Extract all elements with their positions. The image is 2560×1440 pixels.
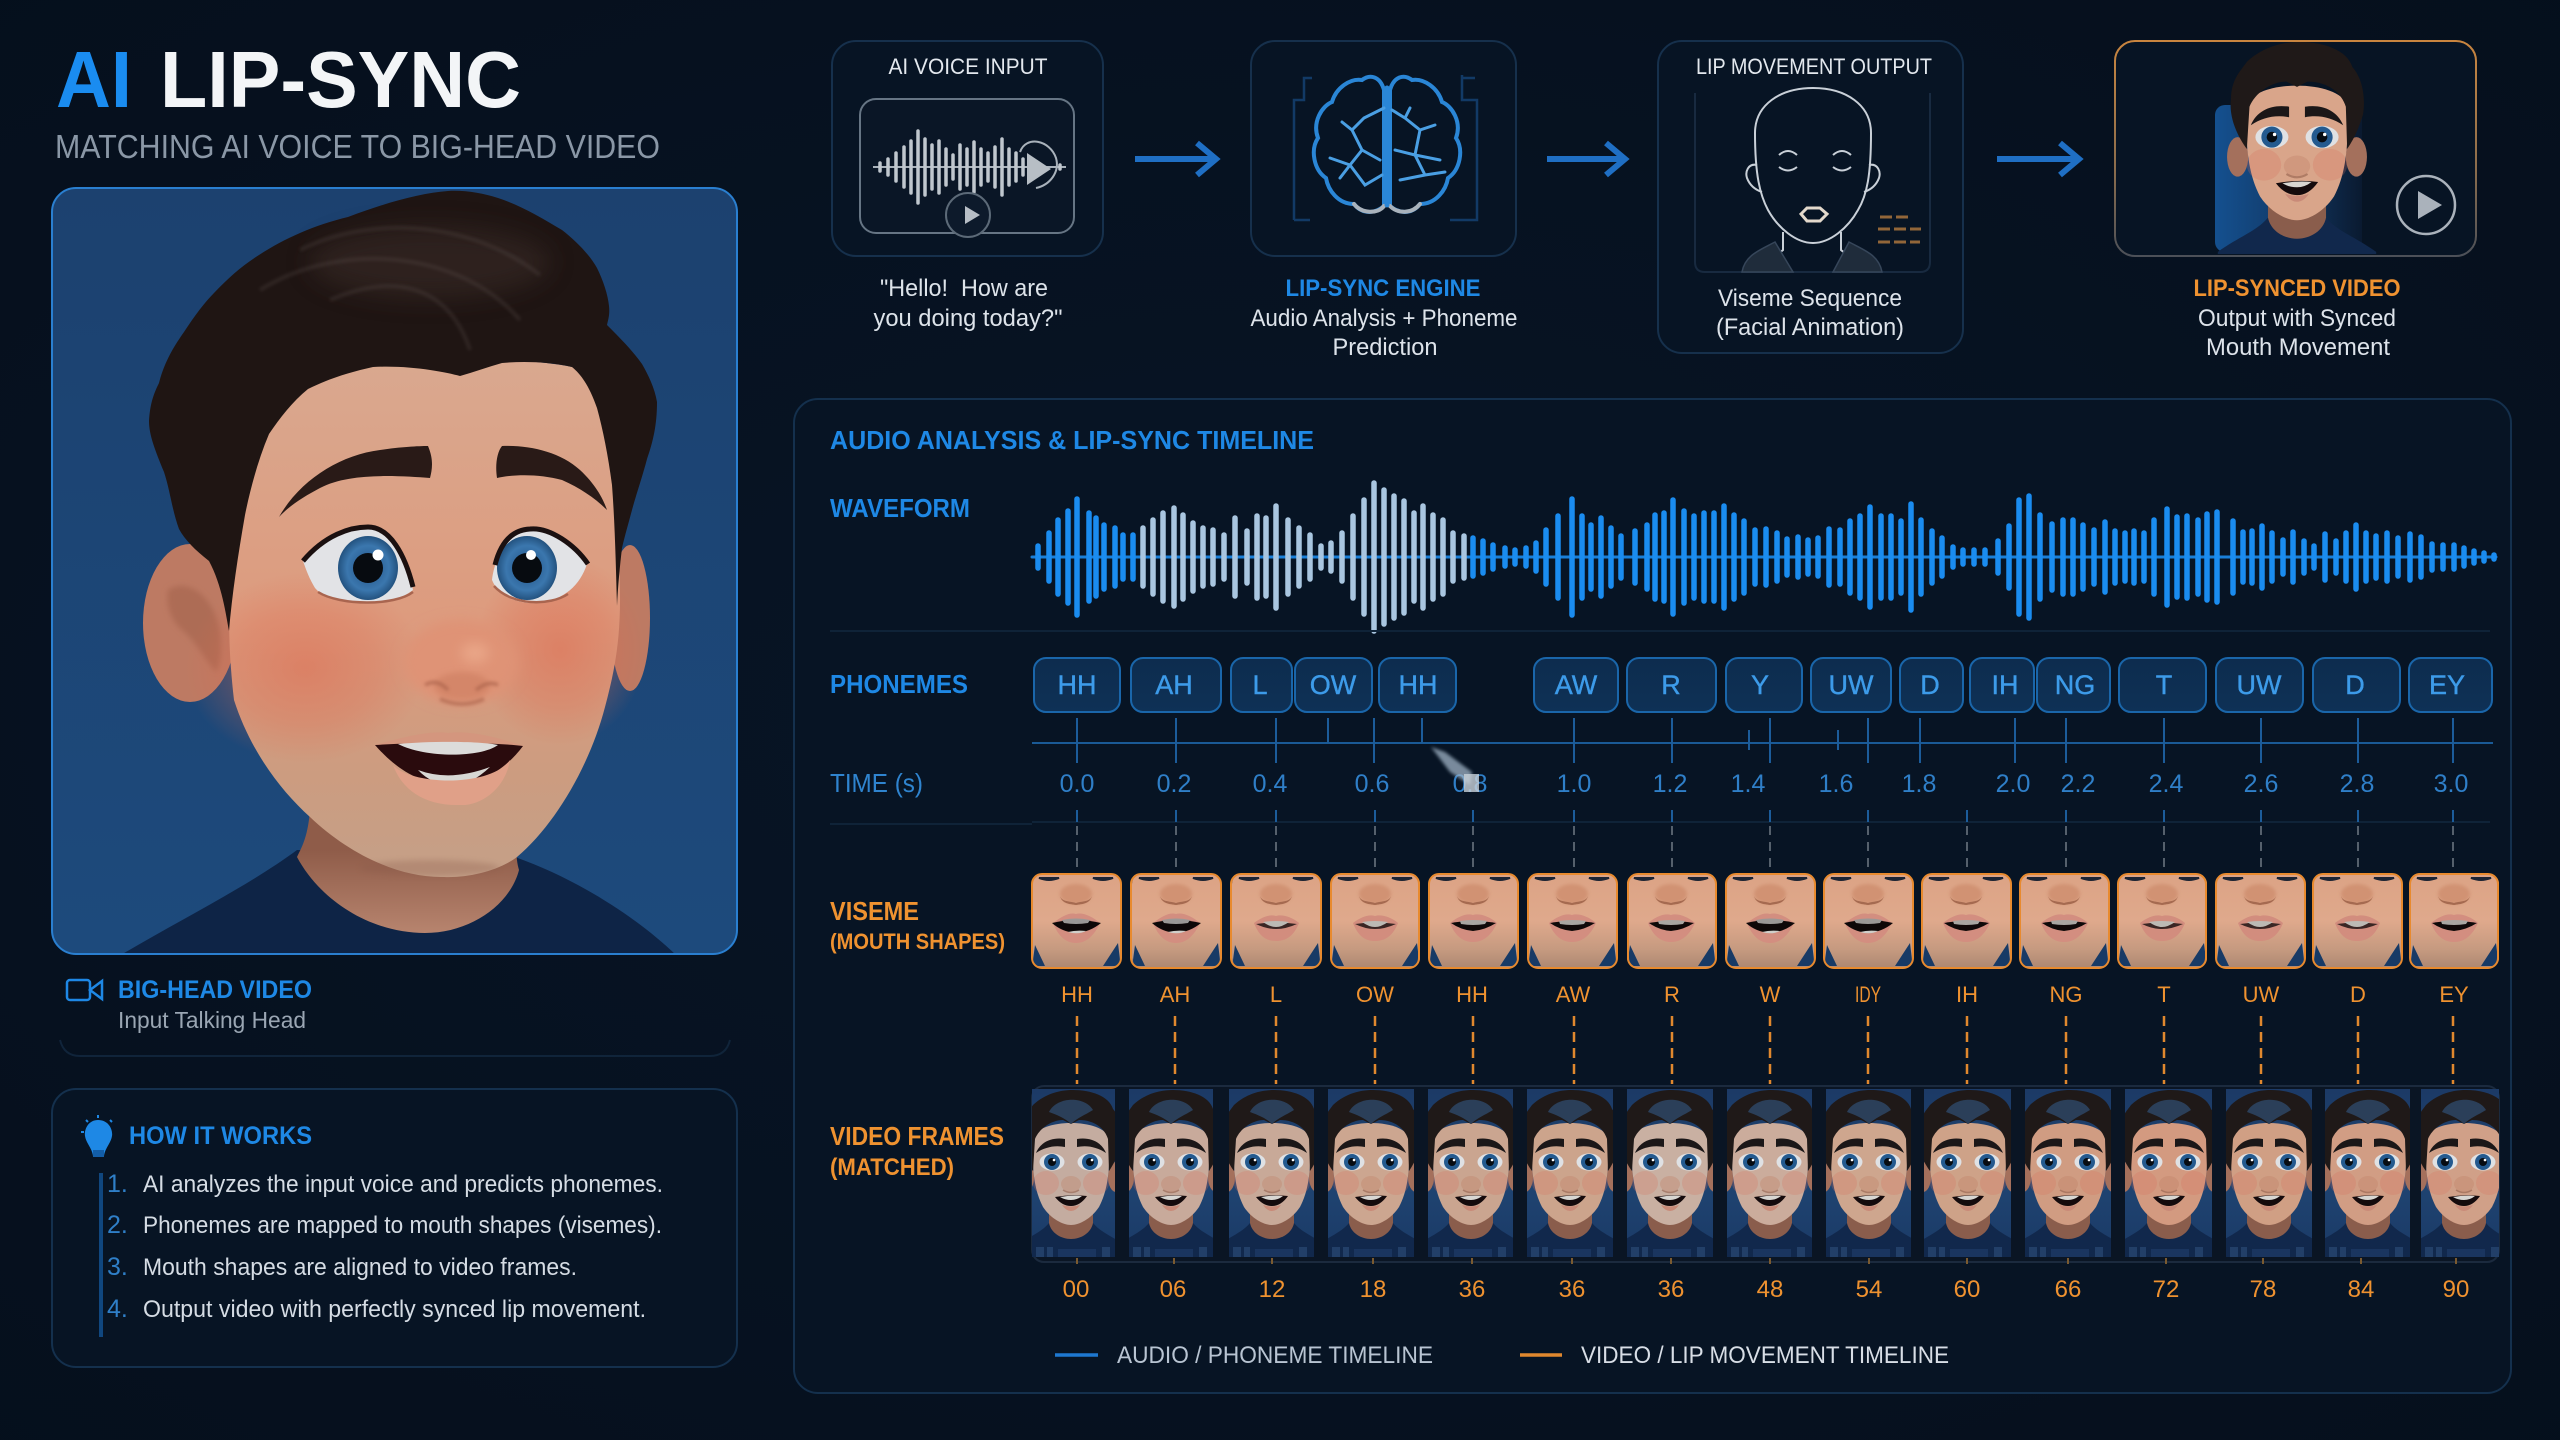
icon: light bulb — [81, 1115, 112, 1157]
time axis labels — [1060, 770, 2468, 798]
time axis labels: 2.4 — [2149, 770, 2183, 798]
time axis labels: 3.0 — [2434, 770, 2468, 798]
viseme labels: OW — [1356, 982, 1394, 1007]
frame numbers: 60 — [1954, 1276, 1980, 1303]
list item 2: 2. — [107, 1211, 128, 1239]
time axis labels: 2.2 — [2061, 770, 2095, 798]
ears — [143, 544, 650, 702]
phoneme labels: AW — [1555, 670, 1598, 700]
viseme labels: NG — [2050, 982, 2082, 1007]
heading: lip-synced video — [2194, 275, 2400, 361]
phoneme labels: HH — [1398, 670, 1438, 700]
phoneme labels: Y — [1751, 670, 1769, 700]
viseme labels: W — [1760, 982, 1781, 1007]
eyes — [303, 527, 588, 603]
card: lip movement output: Viseme Sequence — [1718, 285, 1902, 312]
hair — [149, 191, 657, 631]
video frames label: VIDEO FRAMES — [830, 1121, 1004, 1151]
caption: big-head video — [60, 976, 730, 1056]
panel: timeline: TIME (s) — [830, 768, 923, 798]
card: lip movement output: (Facial Animation) — [1716, 314, 1904, 341]
viseme labels: HH — [1061, 982, 1093, 1007]
video frames label — [830, 1121, 1004, 1181]
time axis labels: 0.8 — [1453, 770, 1487, 798]
quote text: "Hello! How are — [880, 275, 1048, 302]
frame numbers: 00 — [1063, 1276, 1089, 1303]
phoneme labels: D — [1920, 670, 1940, 700]
caption: big-head video: BIG-HEAD VIDEO — [118, 976, 312, 1004]
glitch smudge near 0.8 — [1431, 747, 1479, 792]
phoneme labels: OW — [1310, 670, 1357, 700]
arrow 2 — [1547, 143, 1625, 175]
card: lip-sync engine — [1251, 41, 1516, 256]
card: lip movement output: LIP MOVEMENT OUTPUT — [1696, 54, 1932, 79]
heading: lip-sync engine: LIP-SYNC ENGINE — [1286, 275, 1480, 302]
quote text — [874, 275, 1062, 332]
frame numbers: 06 — [1160, 1276, 1186, 1303]
time axis labels: 0.0 — [1060, 770, 1094, 798]
icon: video camera — [67, 980, 102, 1000]
viseme labels: EY — [2439, 982, 2469, 1007]
list item 4: Output video with perfectly synced lip movement. — [143, 1296, 646, 1323]
heading: lip-synced video: Output with Synced — [2198, 305, 2396, 332]
phoneme labels: D — [2345, 670, 2365, 700]
card: AI voice input — [832, 41, 1103, 256]
viseme row label — [830, 896, 1005, 954]
frame numbers: 90 — [2443, 1276, 2469, 1303]
panel: timeline — [794, 399, 2524, 1393]
face — [185, 359, 645, 877]
phoneme labels: UW — [1829, 670, 1874, 700]
viseme row label: VISEME — [830, 896, 919, 926]
heading: lip-synced video: LIP-SYNCED VIDEO — [2194, 275, 2400, 302]
heading: lip-sync engine: Audio Analysis + Phoneme — [1250, 305, 1518, 332]
arrow 3 — [1997, 143, 2079, 175]
waveform chart — [1032, 483, 2496, 631]
frame numbers — [1063, 1276, 2469, 1303]
phoneme row — [1034, 658, 2492, 712]
heading: lip-sync engine — [1250, 275, 1518, 361]
viseme labels: R — [1664, 982, 1680, 1007]
neck — [297, 810, 519, 933]
icon: face outline — [1742, 88, 1882, 272]
frame numbers: 48 — [1757, 1276, 1783, 1303]
phoneme labels: UW — [2237, 670, 2282, 700]
legend: AUDIO / PHONEME TIMELINE — [1117, 1342, 1433, 1369]
phoneme labels: IH — [1992, 670, 2018, 700]
icon: orange motion dashes — [1878, 217, 1921, 242]
title: LIP-SYNC — [160, 35, 521, 124]
arrow 1 — [1135, 143, 1216, 175]
phoneme labels: HH — [1058, 670, 1096, 700]
time axis labels: 2.0 — [1996, 770, 2030, 798]
panel: timeline: PHONEMES — [830, 669, 968, 699]
frame numbers: 66 — [2055, 1276, 2081, 1303]
nose — [418, 627, 500, 708]
panel: timeline: AUDIO ANALYSIS & LIP-SYNC TIMELINE — [830, 425, 1314, 455]
panel: how it works: HOW IT WORKS — [129, 1122, 312, 1150]
character head — [2218, 42, 2376, 254]
viseme row label: (MOUTH SHAPES) — [830, 929, 1005, 954]
phoneme labels: T — [2156, 670, 2172, 700]
viseme labels: L — [1270, 982, 1282, 1007]
list item 3: 3. — [107, 1253, 128, 1281]
viseme labels: IH — [1956, 982, 1978, 1007]
list item 2: Phonemes are mapped to mouth shapes (visemes). — [143, 1212, 662, 1239]
card: lip movement output — [1658, 41, 1963, 353]
phoneme labels: AH — [1155, 670, 1193, 700]
legend — [1055, 1342, 1949, 1369]
card: lip-synced video — [2115, 41, 2476, 273]
list item 3: Mouth shapes are aligned to video frames. — [143, 1254, 577, 1281]
viseme labels — [1061, 982, 2469, 1007]
time axis labels: 0.4 — [1253, 770, 1287, 798]
panel: timeline: WAVEFORM — [830, 493, 970, 523]
video frames label: (MATCHED) — [830, 1154, 954, 1181]
title: AI — [56, 35, 132, 124]
viseme labels: IDY — [1855, 982, 1881, 1007]
time axis labels: 2.6 — [2244, 770, 2278, 798]
icon: brain — [1314, 77, 1460, 212]
viseme labels: HH — [1456, 982, 1488, 1007]
frame numbers: 84 — [2348, 1276, 2374, 1303]
viseme labels: AW — [1556, 982, 1591, 1007]
frame numbers: 36 — [1459, 1276, 1485, 1303]
frame numbers: 72 — [2153, 1276, 2179, 1303]
heading: lip-synced video: Mouth Movement — [2206, 334, 2390, 361]
icon: play button — [2397, 176, 2455, 234]
list item 1: AI analyzes the input voice and predicts phonemes. — [143, 1171, 663, 1198]
time axis labels: 1.2 — [1653, 770, 1687, 798]
frame numbers: 36 — [1559, 1276, 1585, 1303]
quote text: you doing today?" — [874, 305, 1062, 332]
video frame strip — [1011, 1086, 2524, 1265]
mouth — [375, 742, 523, 805]
eyebrows — [279, 446, 607, 517]
icon: play button — [946, 193, 990, 237]
time axis labels: 0.2 — [1157, 770, 1191, 798]
frame numbers: 54 — [1856, 1276, 1882, 1303]
time axis labels: 1.0 — [1557, 770, 1591, 798]
phoneme labels: R — [1661, 670, 1681, 700]
viseme mouth tiles — [1032, 874, 2499, 968]
time axis labels: 0.6 — [1355, 770, 1389, 798]
viseme labels: AH — [1160, 982, 1190, 1007]
icon: voice waveform — [873, 131, 1066, 203]
phoneme labels: NG — [2055, 670, 2095, 700]
card: AI voice input: AI VOICE INPUT — [888, 54, 1048, 79]
phoneme labels — [1058, 670, 2465, 700]
frame numbers: 18 — [1360, 1276, 1386, 1303]
heading: lip-sync engine: Prediction — [1332, 334, 1438, 361]
phoneme labels: EY — [2429, 670, 2465, 700]
caption: big-head video: Input Talking Head — [118, 1007, 306, 1033]
phoneme labels: L — [1252, 670, 1268, 700]
time axis labels: 1.4 — [1731, 770, 1765, 798]
legend: VIDEO / LIP MOVEMENT TIMELINE — [1581, 1342, 1949, 1369]
viseme labels: T — [2157, 982, 2171, 1007]
list item 1: 1. — [107, 1170, 128, 1198]
time axis labels: 1.8 — [1902, 770, 1936, 798]
viseme labels: D — [2350, 982, 2366, 1007]
subtitle: MATCHING AI VOICE TO BIG-HEAD VIDEO — [55, 128, 660, 165]
panel: big-head character portrait — [52, 188, 737, 956]
shirt — [119, 850, 677, 956]
panel: how it works — [52, 1089, 737, 1367]
time axis labels: 1.6 — [1819, 770, 1853, 798]
frame numbers: 12 — [1259, 1276, 1285, 1303]
frame numbers: 78 — [2250, 1276, 2276, 1303]
viseme labels: UW — [2243, 982, 2280, 1007]
list item 4: 4. — [107, 1295, 128, 1323]
time axis labels: 2.8 — [2340, 770, 2374, 798]
frame numbers: 36 — [1658, 1276, 1684, 1303]
